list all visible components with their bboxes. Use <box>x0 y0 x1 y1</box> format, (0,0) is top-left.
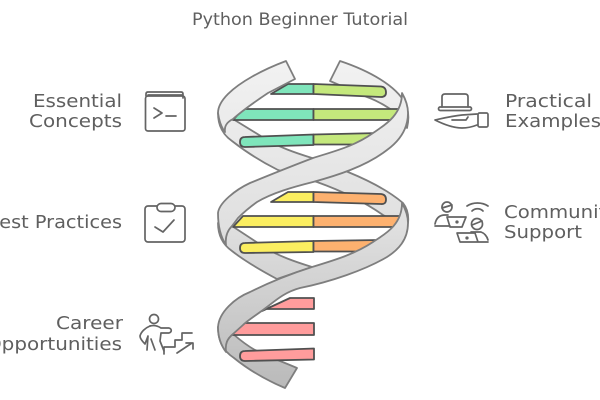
label: Practical Examples: Examples <box>505 111 600 132</box>
icon: community people with laptops <box>435 202 488 242</box>
label: Practical Examples: Practical <box>505 91 592 112</box>
base pair group: teal and lime <box>233 84 404 147</box>
front ribbon: first crossing <box>218 93 408 245</box>
icon: hand holding laptop <box>435 94 488 128</box>
label: Career Opportunities: Career <box>56 313 124 334</box>
front ribbon: second crossing <box>218 203 408 352</box>
base pair group: pink <box>224 298 314 361</box>
label: Essential Concepts: Essential <box>33 91 122 112</box>
label: Career Opportunities <box>0 313 124 355</box>
back ribbon: upper right arc <box>330 61 408 128</box>
back ribbon: lower crossing <box>218 223 312 279</box>
icon: person climbing stairs <box>140 314 193 354</box>
label: Essential Concepts: Concepts <box>29 111 122 132</box>
icon: code book <box>146 92 185 131</box>
icon: clipboard check <box>145 204 185 242</box>
front ribbon: upper left arc <box>218 61 295 132</box>
back ribbon: middle crossing <box>218 113 408 223</box>
label: Community Support <box>504 202 600 243</box>
back ribbon: bottom arc <box>218 327 297 388</box>
DNA helix <box>218 61 408 388</box>
label: Practical Examples <box>505 91 600 132</box>
label: Essential Concepts <box>29 91 122 132</box>
label: Community Support: Support <box>504 222 582 243</box>
base pair group: yellow and orange <box>233 192 404 253</box>
title: Python Beginner Tutorial <box>192 10 408 30</box>
